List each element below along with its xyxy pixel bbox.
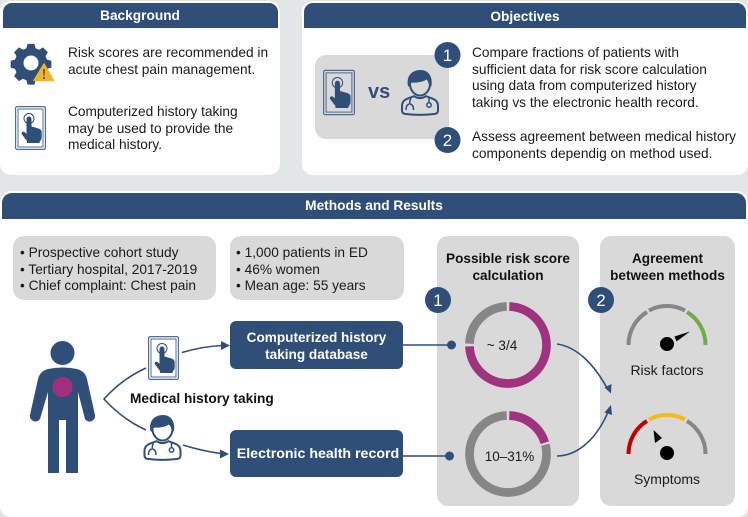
gauge: risk factors [628,306,706,351]
heading: methods and results [2,193,746,219]
comparison box: tablet vs doctor [315,55,449,139]
panel: methods and results [0,191,748,517]
patient characteristics box [230,236,404,300]
number badge 1: 1 [443,46,452,65]
box: computerized history taking database: taking database [265,347,368,362]
study design box: • Chief complaint: Chest pain [20,278,196,293]
objective 2 text: Assess agreement between medical history [472,129,736,144]
objective 1 text: Compare fractions of patients with [472,45,679,60]
objective 1 text: sufficient data for risk score calculation [472,62,707,77]
objective 1 text: using data from computerized history [472,78,697,93]
icon: tablet [149,337,178,379]
label: risk factors: Risk factors [630,362,704,378]
patient characteristics box: • Mean age: 55 years [236,278,366,293]
connector: database to donut [403,340,456,350]
number badge 1 [425,287,451,313]
icon: gear with warning [11,44,53,85]
text: computerized history: medical history. [68,137,162,152]
box: computerized history taking database: Computerized history [247,330,386,345]
text: computerized history: may be used to provide the [68,121,233,136]
number badge 2: 2 [443,131,452,150]
objective 2 text: components dependig on method used. [472,146,712,161]
arrows: patient to methods [104,368,146,430]
study design box: • Prospective cohort study [20,245,178,260]
number badge 2 [588,287,614,313]
heading: possible risk score calculation: calculation [472,268,544,283]
heading: agreement between methods: Agreement [632,251,703,266]
number badge 2 [434,127,460,153]
connector: record to donut [403,452,454,460]
study design box: • Tertiary hospital, 2017-2019 [20,262,197,277]
icon: doctor [144,415,180,460]
heading: methods and results: Methods and Results [305,198,443,213]
arrow: donut 2 to agreement [557,405,612,456]
heading: background: Background [100,8,180,23]
arrow: tablet to database [182,341,230,352]
donut chart: about three quarters [470,306,546,383]
comparison box: tablet vs doctor: vs [368,81,390,103]
patient characteristics box: • 1,000 patients in ED [236,245,368,260]
text: computerized history: Computerized history taking [68,104,238,119]
label: medical history taking: Medical history taking [130,391,274,406]
gauge: symptoms [628,415,706,460]
donut chart: about three quarters: ~ 3/4 [487,338,518,353]
box: computerized history taking database [230,321,403,369]
panel: background [0,1,280,175]
heading: agreement between methods: between methods [610,268,725,283]
panel: objectives [302,1,748,175]
number badge 1: 1 [433,291,443,310]
icon: patient with chest pain [30,341,95,473]
number badge 1 [434,42,460,68]
label: symptoms: Symptoms [634,471,700,487]
objective 1 text: taking vs the electronic health record. [472,95,699,110]
box: electronic health record [230,430,403,477]
study design box [13,236,216,300]
heading: possible risk score calculation: Possible risk score [446,251,570,266]
box: electronic health record: Electronic health record [237,446,399,462]
text: risk scores: acute chest pain management. [68,62,255,77]
donut chart: 10 to 31 percent: 10–31% [485,449,534,464]
panel: agreement between methods [600,236,735,506]
arrow: donut 1 to agreement [557,344,612,394]
patient characteristics box: • 46% women [236,262,320,277]
panel: possible risk score calculation [437,236,579,506]
heading: objectives [304,3,746,28]
heading: background [3,3,278,28]
number badge 2: 2 [596,291,606,310]
donut chart: 10 to 31 percent [470,416,547,492]
text: risk scores: Risk scores are recommended in [68,45,268,60]
heading: objectives: Objectives [490,9,560,24]
arrow: doctor to record [183,445,229,458]
icon: tablet [16,107,45,149]
